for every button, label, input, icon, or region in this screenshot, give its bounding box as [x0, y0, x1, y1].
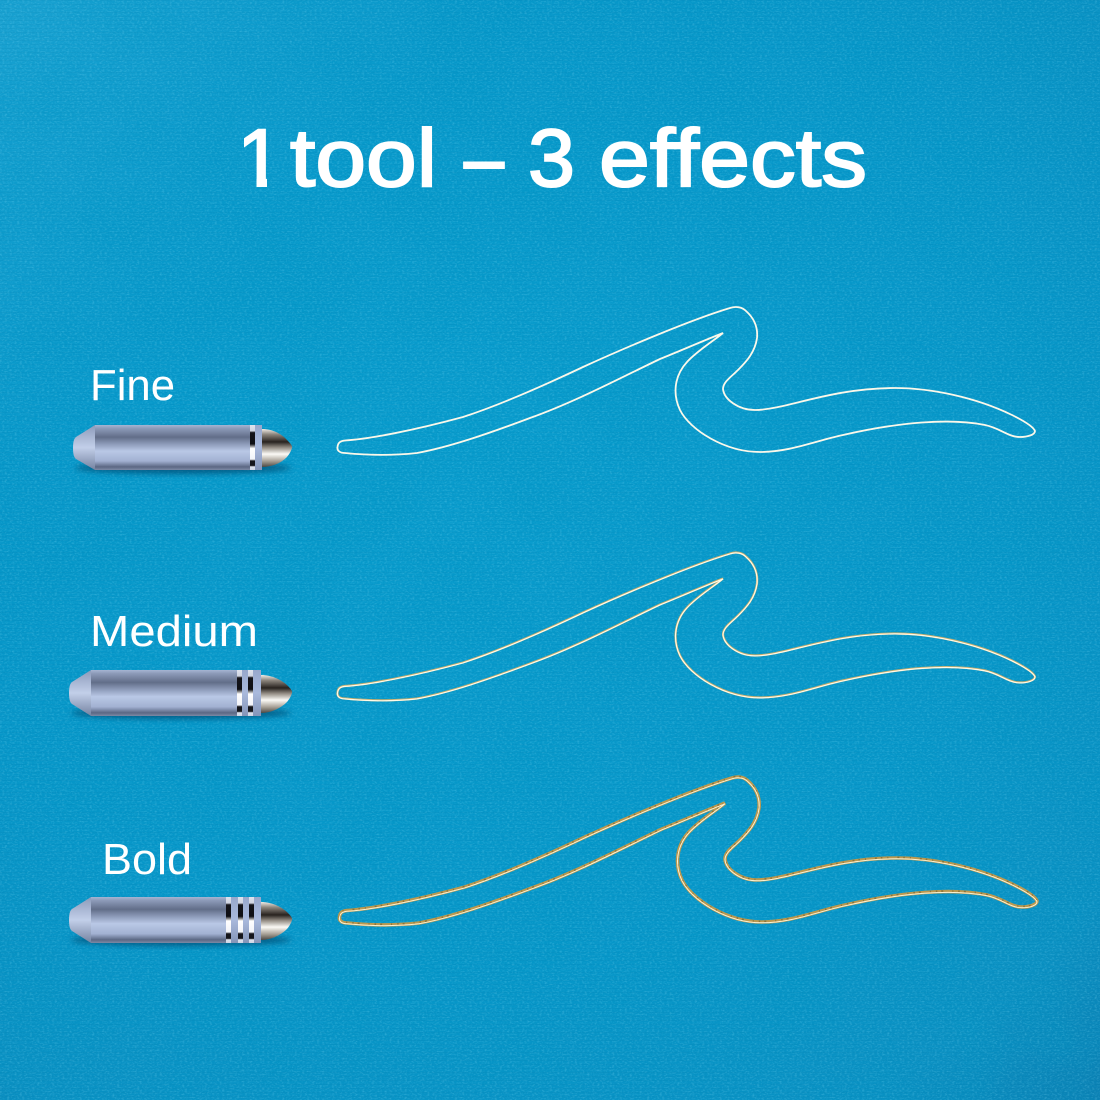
title: 3: [528, 113, 575, 204]
label: Medium: Medium: [90, 607, 258, 656]
icon: bold nib: [69, 897, 292, 946]
title: 1: [237, 113, 283, 204]
title: tool: [290, 113, 437, 204]
icon: fine nib: [73, 425, 292, 474]
stroke: bold gold wave outline: [339, 776, 1037, 926]
label: Fine: Fine: [90, 361, 175, 410]
label: Bold: Bold: [102, 835, 192, 884]
title: –: [464, 113, 504, 204]
title: [244, 126, 865, 188]
stroke: fine wave outline: [337, 307, 1035, 455]
icon: medium nib: [69, 670, 292, 719]
stroke: medium wave outline: [337, 552, 1035, 701]
title: effects: [599, 113, 867, 204]
